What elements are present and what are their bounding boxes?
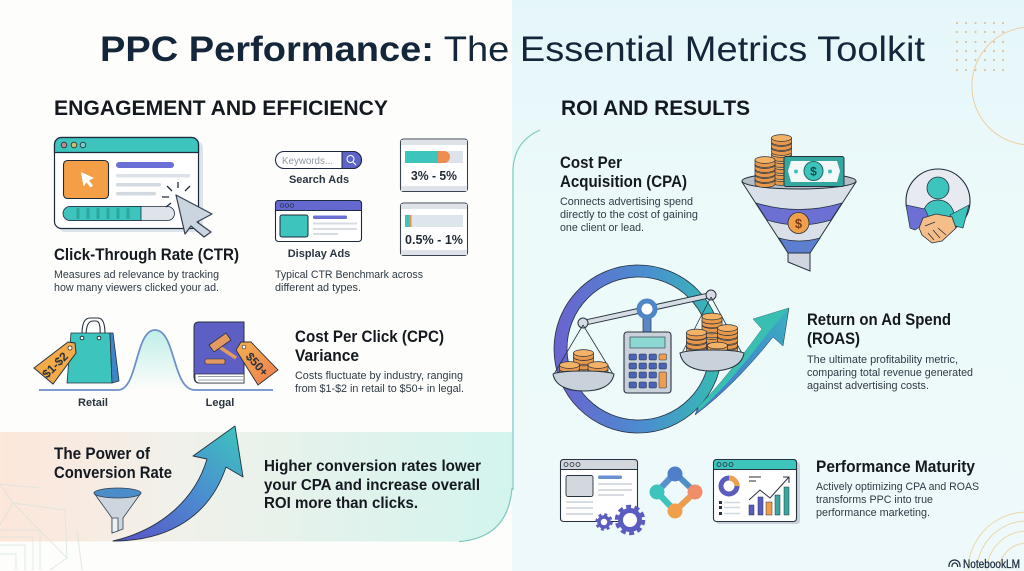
text: CPA description: Connects advertising spend <box>560 196 693 208</box>
text: CTR description <box>54 269 219 294</box>
heading: CPC variance: Variance <box>295 346 359 365</box>
icon: balance scale with calculator <box>553 290 744 393</box>
text: CPA description: directly to the cost of gaining <box>560 209 698 221</box>
heading: click-through rate: Click-Through Rate (CTR) <box>54 245 239 264</box>
icon: law book with price tag <box>194 322 278 385</box>
panel: performance maturity <box>560 457 979 534</box>
label: display ads: Display Ads <box>288 248 350 260</box>
card: display CTR 0.5% - 1% <box>400 203 468 256</box>
text: conversion message: ROI more than clicks. <box>264 495 418 512</box>
card: display CTR 0.5% - 1%: 0.5% - 1% <box>405 232 463 247</box>
icon: law book with price tag: $50+ <box>243 350 271 379</box>
heading: CPA: Acquisition (CPA) <box>560 172 687 191</box>
card: search CTR 3% - 5% <box>400 139 468 192</box>
panel: CTR benchmarks <box>275 139 468 294</box>
icon: money funnel: $ <box>795 216 803 231</box>
icon: client handshake <box>906 169 970 243</box>
text: maturity description: Actively optimizing CPA and ROAS <box>816 481 979 493</box>
decoration: top-right dots and circle <box>956 22 1024 145</box>
icon: display ad window <box>276 200 362 242</box>
text: maturity description: transforms PPC into true <box>816 494 933 506</box>
label: legal: Legal <box>206 397 234 409</box>
heading: CPC variance: Cost Per Click (CPC) <box>295 327 444 346</box>
text: CPA description: one client or lead. <box>560 222 644 234</box>
background: right panel <box>512 0 1024 571</box>
background decoration: bottom-left geometry <box>0 484 82 570</box>
text: CPC description: Costs fluctuate by industry, ranging <box>295 370 463 382</box>
heading: ROAS: Return on Ad Spend <box>807 310 951 329</box>
icon: search bar: Keywords... <box>282 155 333 167</box>
text: conversion message: your CPA and increase overall <box>264 477 480 494</box>
title: PPC Performance: The Essential Metrics Toolkit <box>100 30 925 69</box>
heading: ROI and results: ROI AND RESULTS <box>561 97 750 120</box>
icon: funnel <box>94 488 141 533</box>
heading: performance maturity: Performance Maturity <box>816 457 975 476</box>
conversion band background <box>0 432 512 542</box>
icon: shopping bag with price tag: $1-$2 <box>39 349 71 381</box>
heading: CPC variance <box>295 327 444 365</box>
heading: CPA: Cost Per <box>560 153 622 172</box>
text: conversion message <box>264 458 481 512</box>
panel: return on ad spend <box>553 265 973 433</box>
label: retail: Retail <box>78 397 108 409</box>
icon: circular arrow <box>554 265 789 433</box>
heading: conversion rate <box>54 445 172 482</box>
text: CPC description <box>295 370 464 395</box>
text: CPC description: from $1-$2 in retail to $50+ in legal. <box>295 383 464 395</box>
panel: cost per acquisition <box>560 135 970 271</box>
label: search ads: Search Ads <box>289 174 349 186</box>
text: conversion message: Higher conversion rates lower <box>264 458 481 475</box>
icon: shopping bag with price tag <box>34 318 119 384</box>
text: ROAS description <box>807 354 973 392</box>
text: ROAS description: The ultimate profitability metric, <box>807 354 958 366</box>
heading: conversion rate: Conversion Rate <box>54 464 172 482</box>
panel: power of conversion rate <box>54 426 481 541</box>
chart: bell curve <box>39 330 273 390</box>
heading: ROAS: (ROAS) <box>807 329 860 348</box>
icon: money funnel <box>742 135 856 271</box>
icon: search bar <box>276 152 362 168</box>
icon: money funnel: $ <box>810 164 817 178</box>
heading: engagement and efficiency: ENGAGEMENT AND EFFICIENCY <box>54 97 388 120</box>
panel: click-through rate <box>54 138 239 294</box>
heading: ROAS <box>807 310 951 348</box>
card: search CTR 3% - 5%: 3% - 5% <box>411 168 457 183</box>
icon: connected nodes <box>650 466 702 518</box>
panel divider curve <box>459 130 540 542</box>
icon: analytics dashboard <box>714 460 800 524</box>
text: CTR description: Measures ad relevance by tracking <box>54 269 219 281</box>
heading: conversion rate: The Power of <box>54 445 150 463</box>
text: CTR description: how many viewers clicked your ad. <box>54 282 219 294</box>
heading: CPA <box>560 153 687 191</box>
text: maturity description <box>816 481 979 519</box>
icon: browser with cursor <box>54 138 212 237</box>
text: benchmark caption <box>275 269 423 294</box>
text: benchmark caption: different ad types. <box>275 282 361 294</box>
text: maturity description: performance marketing. <box>816 507 930 519</box>
panel: cost per click <box>34 318 464 409</box>
text: ROAS description: comparing total revenue generated <box>807 367 973 379</box>
icon: browser with gears <box>560 460 644 534</box>
text: CPA description <box>560 196 698 234</box>
arrow: conversion growth <box>113 426 243 541</box>
text: ROAS description: against advertising costs. <box>807 380 929 392</box>
decoration: bottom-right arcs <box>968 512 1024 570</box>
text: benchmark caption: Typical CTR Benchmark across <box>275 269 423 281</box>
